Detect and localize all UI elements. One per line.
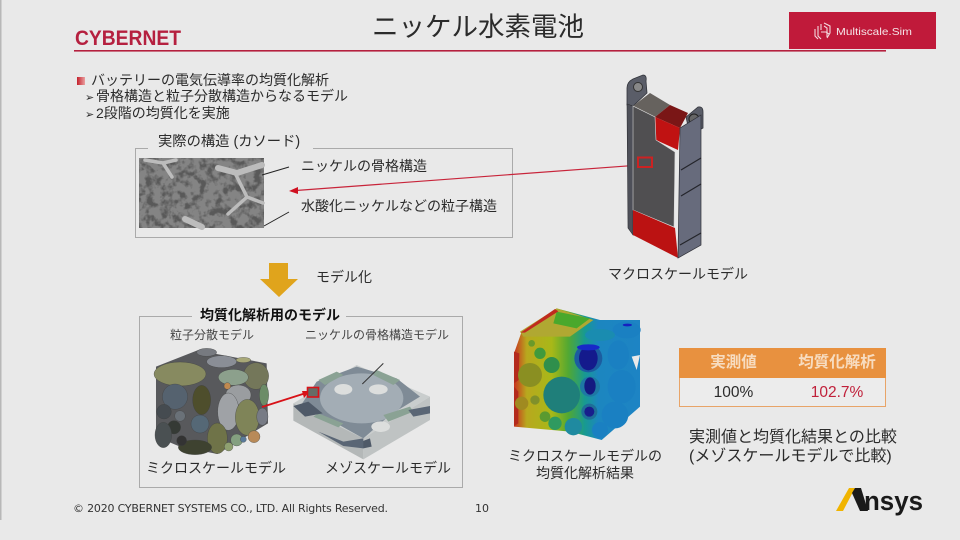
comparison note: (メゾスケールモデルで比較) [689, 446, 892, 465]
panel: homogenisation models [140, 307, 462, 488]
label: micro model result: ミクロスケールモデルの [508, 448, 662, 464]
comparison note: 実測値と均質化結果との比較 [689, 428, 897, 446]
panel: homogenisation models: ミクロスケールモデル [146, 460, 286, 476]
label: micro model result: 均質化解析結果 [536, 465, 634, 481]
logo: Multiscale.Sim: Multiscale.Sim [836, 26, 912, 38]
label: micro model result [508, 448, 662, 481]
title: ニッケル水素電池 [372, 12, 584, 42]
logo: CYBERNET: CYBERNET [75, 27, 181, 50]
bullet list: バッテリーの電気伝導率の均質化解析 [91, 72, 329, 88]
table: comparison: 実測値 [710, 353, 757, 371]
battery macro model [627, 75, 703, 258]
copyright: © 2020 CYBERNET SYSTEMS CO., LTD. All Rights Reserved. [73, 502, 388, 515]
panel: homogenisation models: ニッケルの骨格構造モデル [305, 327, 449, 342]
battery tabs [627, 75, 703, 135]
bullet marker [77, 77, 85, 85]
micro cube [154, 348, 269, 455]
micrograph [139, 158, 264, 228]
bullet list: 骨格構造と粒子分散構造からなるモデル [96, 88, 348, 104]
arrow: macro to structure [289, 165, 640, 194]
selection box [638, 158, 652, 167]
label: modelling: モデル化 [316, 269, 372, 285]
panel: homogenisation models: 均質化解析用のモデル [200, 307, 340, 323]
panel: actual structure: 実際の構造 (カソード) [158, 133, 300, 150]
logo: Ansys [836, 486, 923, 516]
logo: Ansys: nsys [864, 486, 923, 516]
table: comparison [679, 348, 886, 406]
panel: actual structure: ニッケルの骨格構造 [301, 158, 427, 174]
panel: homogenisation models: 粒子分散モデル [170, 327, 254, 342]
arrow: modelling [260, 263, 298, 297]
icon: Multiscale.Sim mark [815, 23, 830, 39]
panel: homogenisation models: メゾスケールモデル [325, 460, 451, 476]
table: comparison: 102.7% [811, 384, 863, 401]
table: comparison: 均質化解析 [798, 352, 876, 371]
bullet list: ➢ [85, 92, 94, 104]
bullet list: ➢ [85, 109, 94, 121]
label: macro scale model: マクロスケールモデル [608, 266, 748, 282]
header rule [74, 50, 886, 52]
comparison note [689, 428, 897, 465]
panel: actual structure: 水酸化ニッケルなどの粒子構造 [301, 198, 497, 214]
meso cube [293, 363, 430, 459]
table: comparison: 100% [714, 384, 754, 401]
logo: Multiscale.Sim [789, 12, 936, 49]
leader lines [262, 167, 289, 226]
result heat-map cube [514, 308, 641, 440]
panel: actual structure [136, 133, 512, 238]
bullet list: 2段階の均質化を実施 [96, 105, 230, 121]
zoom marker and arrow [262, 388, 318, 407]
bullet list [77, 72, 348, 121]
page number: 10 [475, 502, 489, 515]
